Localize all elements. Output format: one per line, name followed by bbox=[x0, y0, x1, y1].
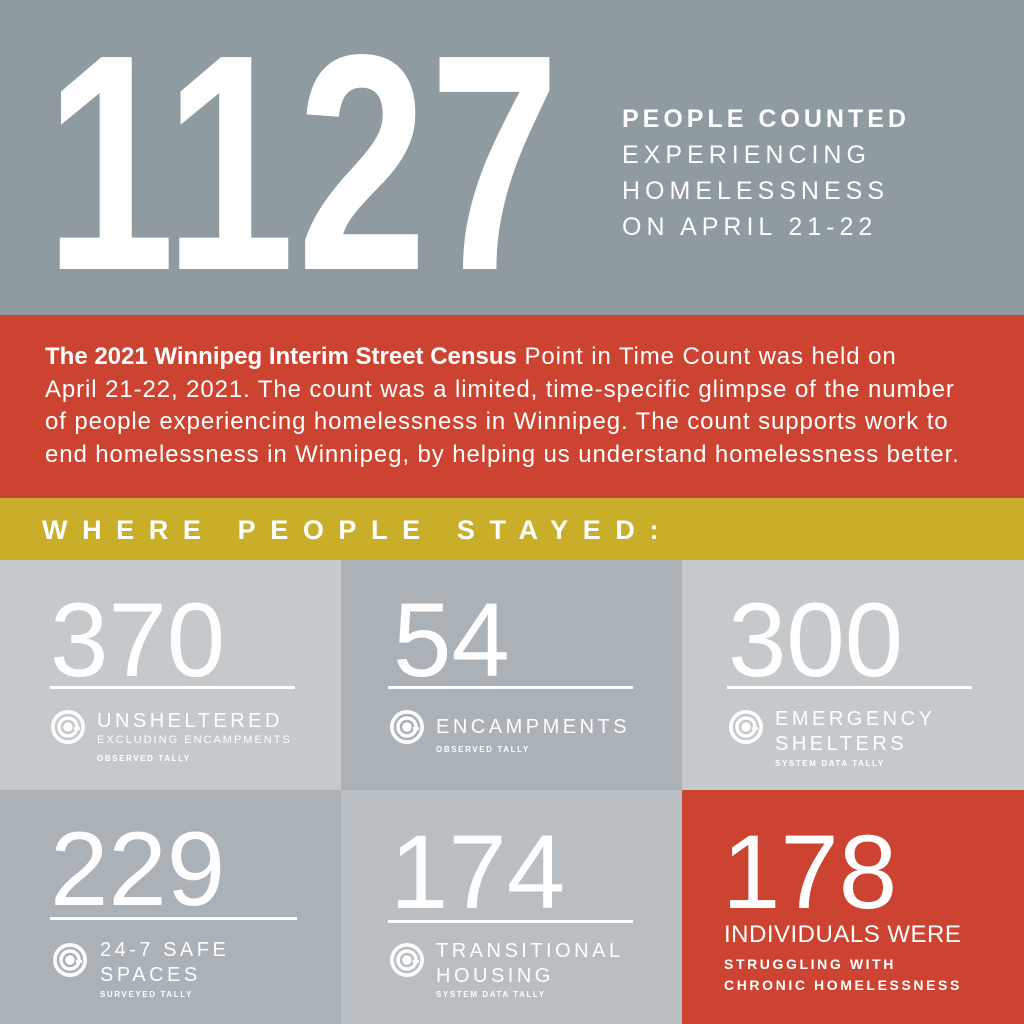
panel: transitional housing: SYSTEM DATA TALLY bbox=[436, 990, 546, 999]
panel: safe spaces: 24-7 SAFE bbox=[100, 939, 229, 961]
panel: emergency shelters: 300 bbox=[728, 582, 903, 699]
panel: unsheltered bbox=[0, 560, 341, 790]
icon: at bbox=[390, 710, 424, 744]
big number 1127: 1127 bbox=[45, 0, 562, 335]
panel: encampments: 54 bbox=[393, 582, 510, 699]
headline text: HOMELESSNESS bbox=[622, 177, 889, 205]
paragraph text: The 2021 Winnipeg Interim Street Census Point in Time Count was held on bbox=[45, 343, 897, 370]
panel: chronic homelessness bbox=[682, 790, 1024, 1024]
panel: safe spaces bbox=[0, 790, 341, 1024]
panel: transitional housing bbox=[341, 790, 682, 1024]
panel: emergency shelters: SYSTEM DATA TALLY bbox=[775, 759, 885, 768]
icon: at bbox=[53, 943, 87, 977]
headline text bbox=[622, 105, 910, 241]
paragraph text bbox=[45, 343, 960, 468]
panel: transitional housing: 174 bbox=[390, 814, 565, 931]
panel: encampments bbox=[341, 560, 682, 790]
panel: transitional housing: TRANSITIONAL bbox=[436, 940, 624, 962]
panel: emergency shelters: SHELTERS bbox=[775, 733, 907, 755]
panel: chronic homelessness: 178 bbox=[722, 814, 897, 931]
panel: safe spaces: 229 bbox=[50, 811, 225, 928]
headline text: PEOPLE COUNTED bbox=[622, 105, 910, 133]
panel: safe spaces: SPACES bbox=[100, 964, 201, 986]
headline text: ON APRIL 21-22 bbox=[622, 213, 877, 241]
panel: chronic homelessness: INDIVIDUALS WERE bbox=[724, 921, 961, 948]
heading: where people stayed bbox=[0, 498, 1024, 560]
panel: chronic homelessness: CHRONIC HOMELESSNESS bbox=[724, 977, 962, 993]
panel: headline bbox=[0, 0, 1024, 315]
panel: emergency shelters: EMERGENCY bbox=[775, 708, 935, 730]
panel: chronic homelessness: STRUGGLING WITH bbox=[724, 956, 896, 972]
panel: unsheltered: OBSERVED TALLY bbox=[97, 754, 191, 763]
icon: at bbox=[51, 710, 85, 744]
panel: safe spaces: SURVEYED TALLY bbox=[100, 990, 193, 999]
paragraph text: April 21-22, 2021. The count was a limited, time-specific glimpse of the number bbox=[45, 376, 955, 403]
icon: at bbox=[390, 943, 424, 977]
panel: unsheltered: UNSHELTERED bbox=[97, 710, 283, 732]
headline text: EXPERIENCING bbox=[622, 141, 871, 169]
icon: at bbox=[729, 710, 763, 744]
panel: unsheltered: 370 bbox=[50, 582, 225, 699]
panel: transitional housing: HOUSING bbox=[436, 965, 554, 987]
panel: unsheltered: EXCLUDING ENCAMPMENTS bbox=[97, 734, 292, 746]
panel: emergency shelters bbox=[682, 560, 1024, 790]
paragraph text: of people experiencing homelessness in Winnipeg. The count supports work to bbox=[45, 408, 949, 435]
panel: intro paragraph bbox=[0, 315, 1024, 498]
heading: where people stayed: WHERE PEOPLE STAYED: bbox=[42, 515, 673, 545]
panel: encampments: ENCAMPMENTS bbox=[436, 716, 630, 738]
panel: encampments: OBSERVED TALLY bbox=[436, 745, 530, 754]
paragraph text: end homelessness in Winnipeg, by helping us understand homelessness better. bbox=[45, 441, 960, 468]
